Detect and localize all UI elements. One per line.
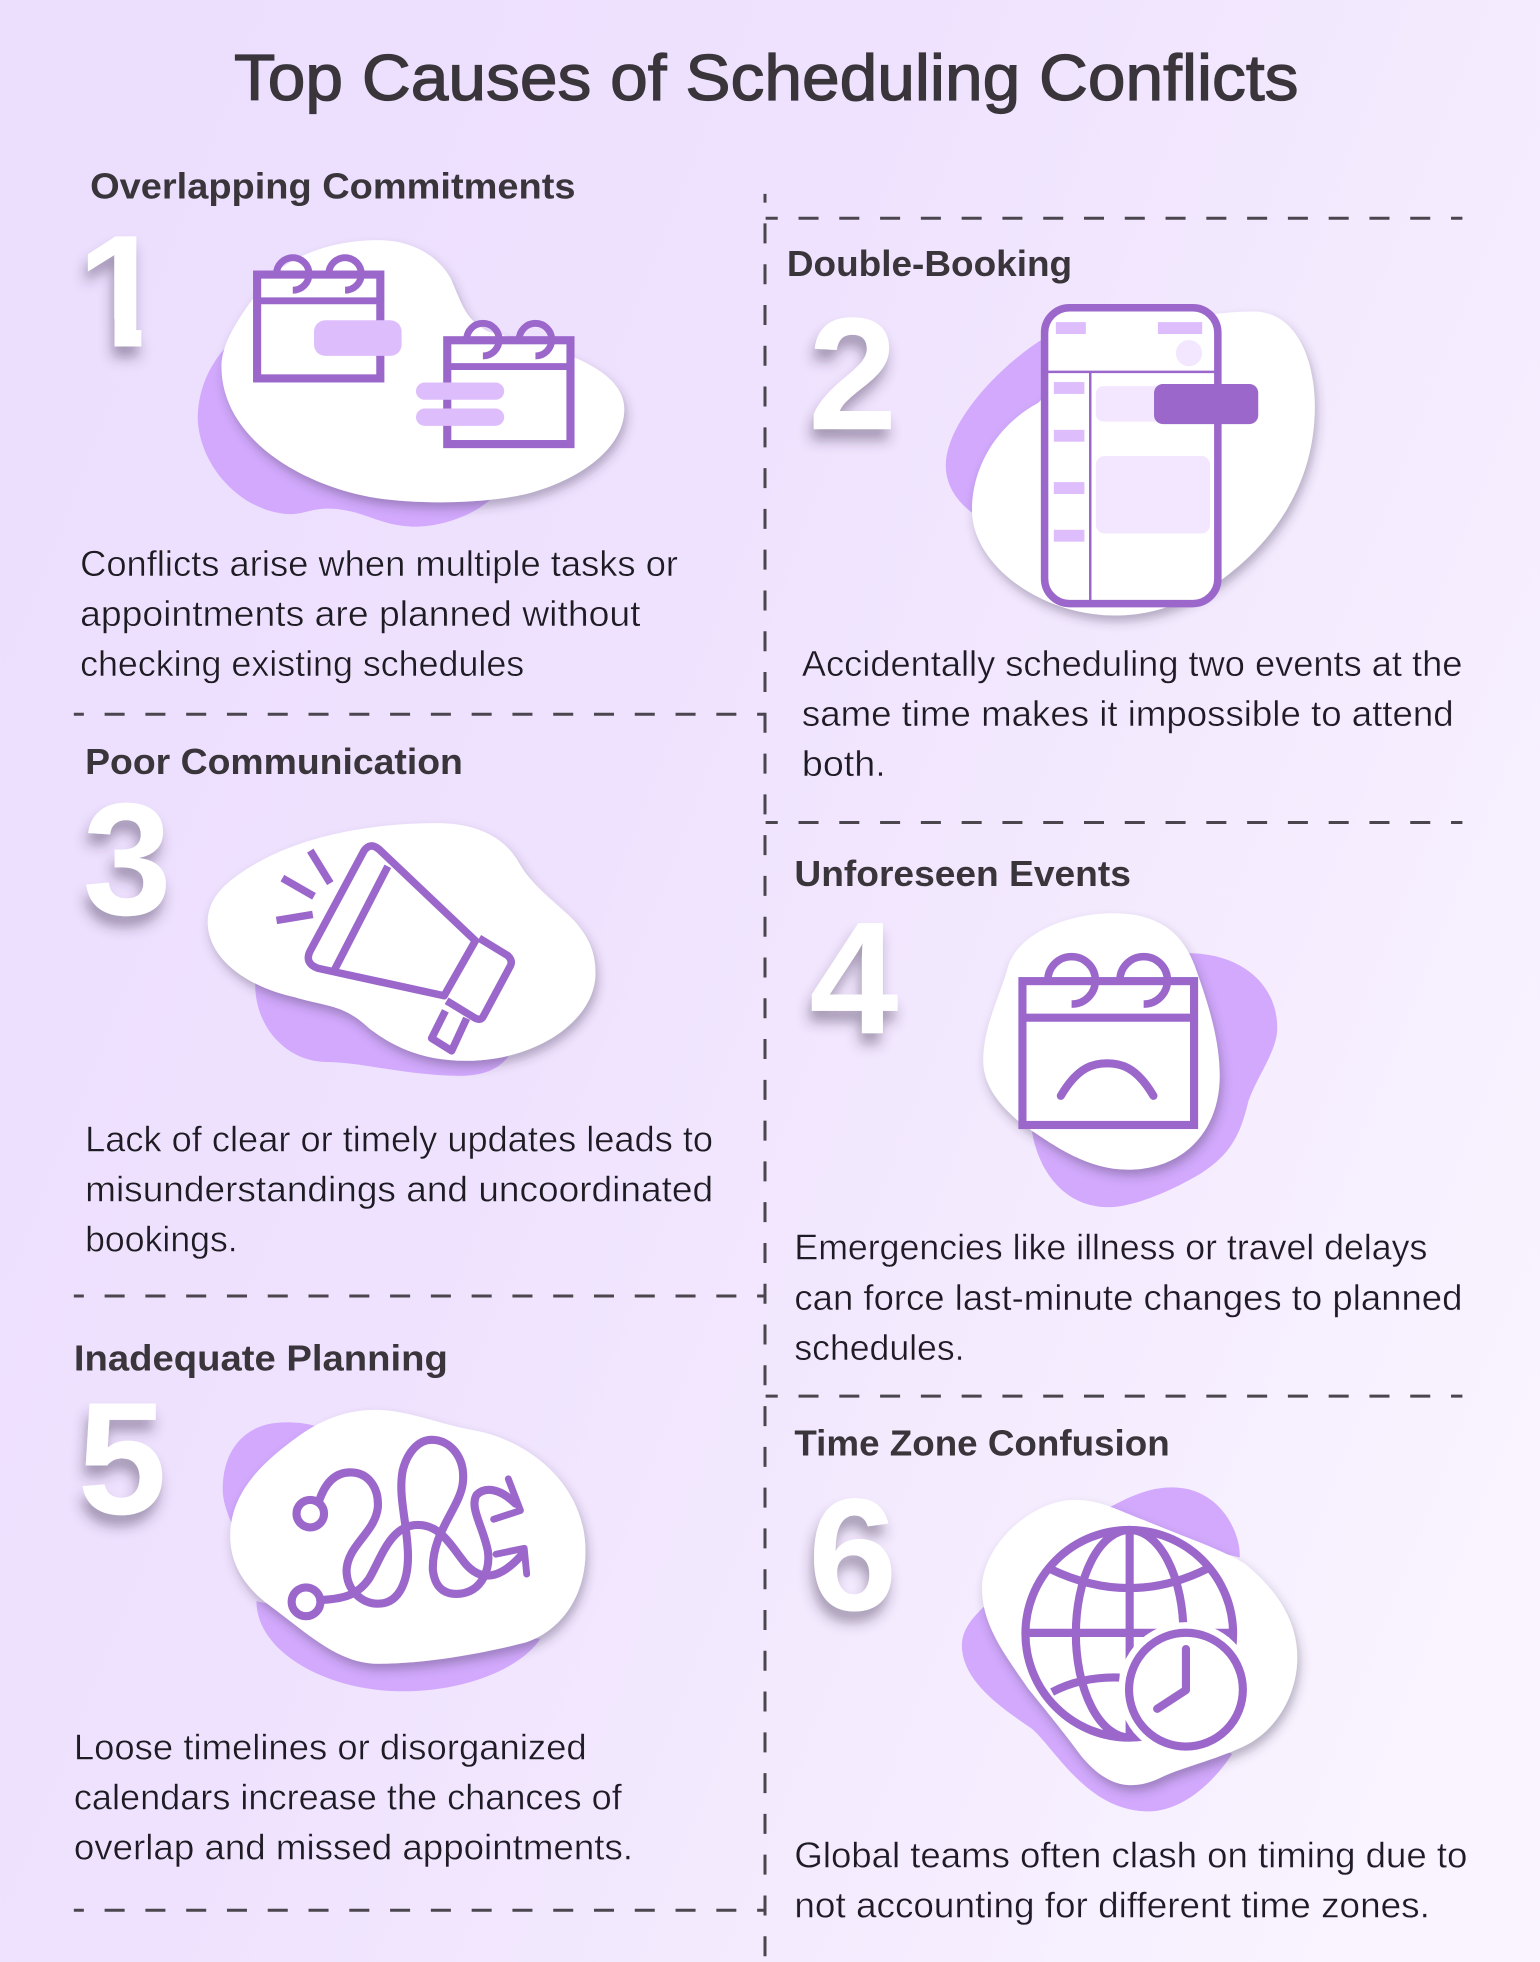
description: unforeseen events [794,1227,1462,1368]
panel: overlapping commitments [77,166,678,684]
description: time zone confusion: Global teams often clash on timing due to [794,1835,1467,1876]
illustration: globe with clock [962,1487,1297,1811]
description: time zone confusion: not accounting for different time zones. [794,1885,1430,1926]
panel: double-booking [787,243,1462,784]
illustration: two overlapping calendars [198,240,624,527]
description: poor communication: Lack of clear or timely updates leads to [85,1119,713,1160]
heading: unforeseen events: Unforeseen Events [794,853,1131,894]
heading: inadequate planning: Inadequate Planning [74,1337,448,1378]
description: double-booking: Accidentally scheduling two events at the [802,643,1462,684]
description: overlapping commitments: checking existing schedules [80,643,524,684]
description: double-booking: both. [802,743,886,784]
panel: inadequate planning [74,1337,633,1868]
description: inadequate planning [74,1726,633,1868]
number 5: 5 [78,1369,167,1548]
description: overlapping commitments [80,543,678,684]
description: time zone confusion [794,1835,1467,1926]
description: inadequate planning: overlap and missed appointments. [74,1827,633,1868]
illustration: megaphone [208,823,595,1076]
heading: poor communication: Poor Communication [85,741,463,782]
heading: double-booking: Double-Booking [787,243,1072,284]
description: unforeseen events: Emergencies like illness or travel delays [794,1227,1427,1268]
panel: poor communication [83,741,713,1260]
description: poor communication: bookings. [85,1219,238,1260]
number 1: 1 [77,202,166,381]
description: inadequate planning: Loose timelines or disorganized [74,1726,587,1767]
illustration: sad calendar [983,913,1277,1207]
description: unforeseen events: schedules. [794,1327,965,1368]
description: overlapping commitments: Conflicts arise when multiple tasks or [80,543,678,584]
heading: overlapping commitments: Overlapping Commitments [90,166,575,207]
number 4: 4 [809,888,898,1067]
illustration: tangled path [223,1410,585,1691]
description: overlapping commitments: appointments are planned without [80,593,641,634]
description: unforeseen events: can force last-minute changes to planned [794,1277,1462,1318]
description: poor communication: misunderstandings and uncoordinated [85,1169,713,1210]
description: double-booking: same time makes it impossible to attend [802,693,1454,734]
illustration: phone calendar with double booking [946,308,1315,615]
panel: time zone confusion [794,1422,1467,1926]
title: Top Causes of Scheduling Conflicts [234,41,1299,114]
panel: unforeseen events [794,853,1462,1368]
number 6: 6 [808,1465,897,1644]
number 3: 3 [83,769,172,948]
description: inadequate planning: calendars increase the chances of [74,1777,623,1818]
description: double-booking [802,643,1462,784]
description: poor communication [85,1119,713,1260]
number 2: 2 [808,284,897,463]
heading: time zone confusion: Time Zone Confusion [794,1422,1170,1463]
